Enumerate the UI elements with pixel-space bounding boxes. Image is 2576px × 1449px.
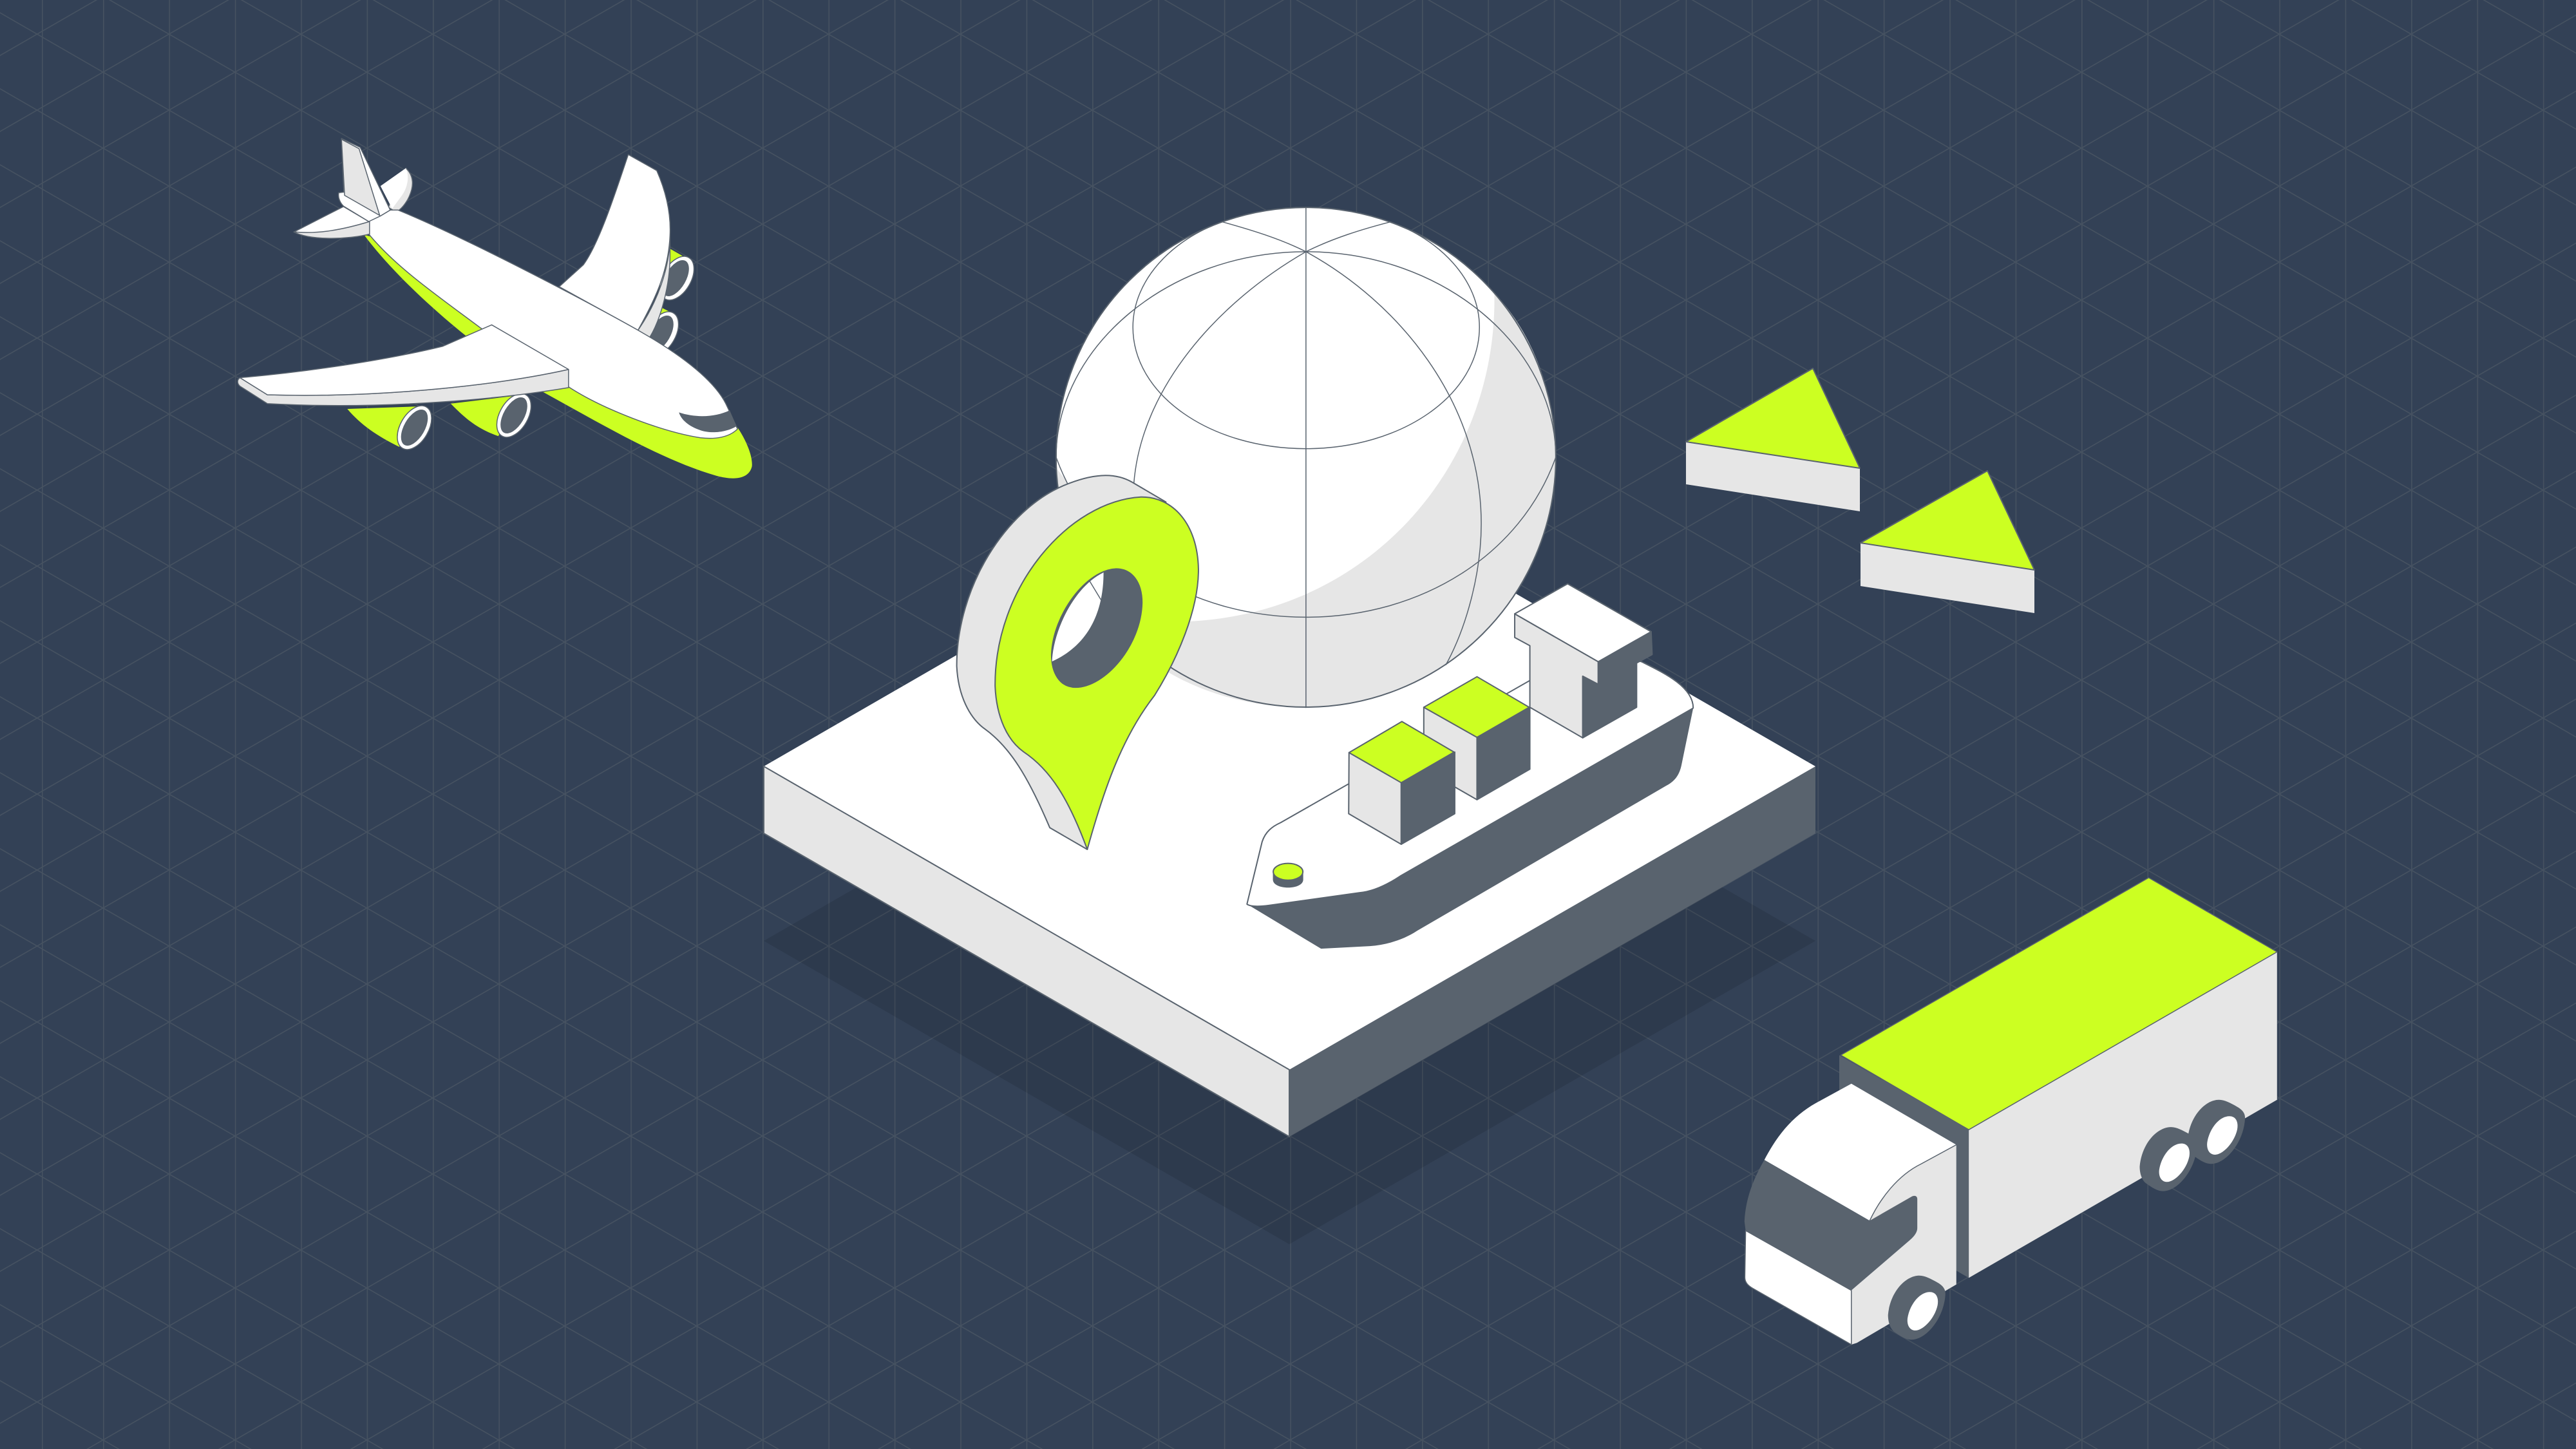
floating triangle 1	[1686, 368, 1860, 511]
front wheel	[1888, 1276, 1946, 1340]
platform	[764, 463, 1815, 1137]
tail	[294, 138, 390, 238]
cab front	[1745, 1231, 1852, 1345]
cargo ship	[1247, 583, 1693, 949]
location pin	[957, 475, 1198, 849]
cockpit window	[679, 410, 736, 432]
far tailplane	[381, 168, 412, 212]
ship hull	[1247, 708, 1693, 949]
floating triangle 2	[1861, 471, 2034, 613]
lime belly	[364, 235, 752, 478]
cab roof edge	[1870, 1145, 1956, 1221]
cab side	[1852, 1145, 1956, 1345]
near engines	[390, 388, 538, 455]
front container	[1349, 721, 1455, 844]
fuselage	[369, 210, 737, 439]
windshield	[1745, 1160, 1917, 1291]
bow bollard	[1273, 864, 1303, 887]
far wing	[559, 155, 670, 337]
cab roof	[1765, 1084, 1956, 1221]
middle wheel	[2140, 1127, 2197, 1191]
airplane	[238, 138, 752, 478]
rear container	[1424, 677, 1530, 800]
delivery truck	[1745, 878, 2277, 1345]
ship bridge	[1515, 583, 1652, 738]
far engines	[637, 249, 701, 361]
cargo box	[1839, 878, 2277, 1278]
near wing	[238, 325, 569, 406]
near engine pylons	[347, 395, 517, 447]
rear wheel	[2188, 1100, 2245, 1164]
globe	[1056, 207, 1556, 708]
ship deck	[1247, 658, 1693, 906]
platform shadow	[764, 638, 1815, 1244]
